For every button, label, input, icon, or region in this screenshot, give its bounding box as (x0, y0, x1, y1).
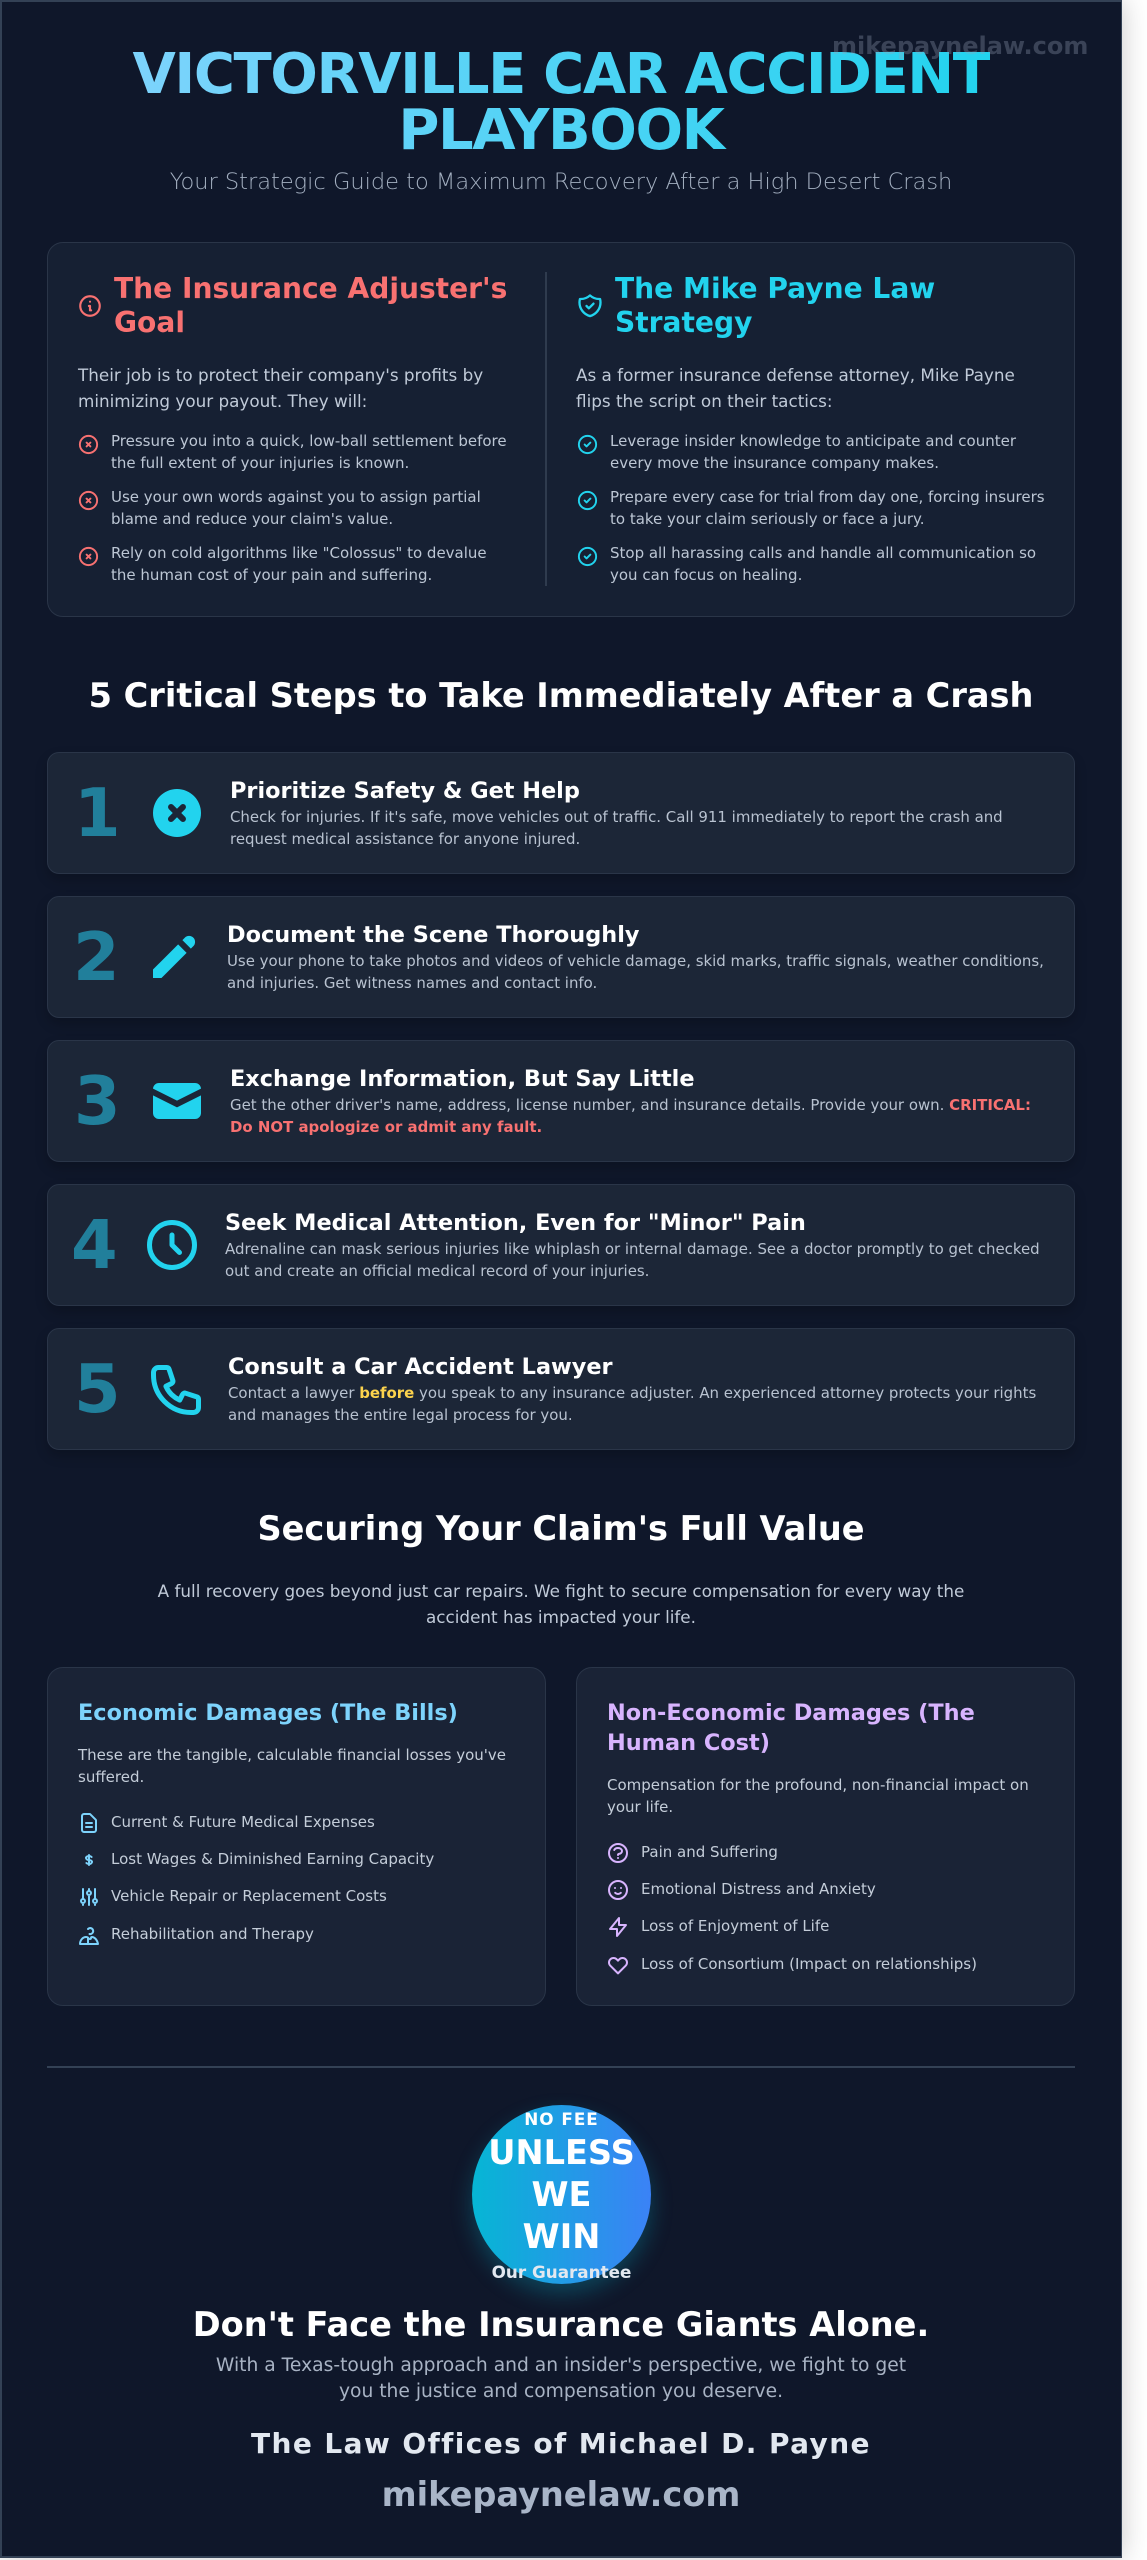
icon: x circle 1 (78, 434, 98, 454)
title (132, 42, 990, 163)
icon: x circle 2 (78, 490, 98, 510)
heading: insurance adjuster's goal (114, 272, 507, 339)
step 4 title: Seek Medical Attention, Even for "Minor" Pain (225, 1210, 806, 1236)
list item: vehicle repair: Vehicle Repair or Replacement Costs (111, 1887, 387, 1905)
step 4 description: Adrenaline can mask serious injuries like whiplash or internal damage. See a doctor promptly to get checked (225, 1240, 1040, 1258)
list item: own words: Use your own words against you to assign partial (111, 488, 481, 506)
badge: unless we win: WE (532, 2175, 591, 2214)
text: non-economic intro: Compensation for the profound, non-financial impact on (607, 1776, 1029, 1794)
list item: algorithms (111, 544, 487, 584)
list item: insider knowledge: Leverage insider knowledge to anticipate and counter (610, 432, 1016, 450)
badge: our guarantee: Our Guarantee (492, 2262, 631, 2282)
list item: insider knowledge: every move the insurance company makes. (610, 454, 939, 472)
text: strategy intro: As a former insurance defense attorney, Mike Payne (576, 365, 1015, 385)
badge: unless we win: WIN (523, 2217, 600, 2256)
list item: stop calls: you can focus on healing. (610, 566, 802, 584)
text: call to action: With a Texas-tough approach and an insider's perspective, we fight to get (216, 2354, 906, 2376)
title: VICTORVILLE CAR ACCIDENT (132, 42, 990, 107)
text: non-economic intro (607, 1776, 1029, 1816)
watermark: mikepaynelaw.com (832, 32, 1088, 60)
step 1 description: request medical assistance for anyone injured. (230, 830, 580, 848)
list item: prepare for trial: Prepare every case for trial from day one, forcing insurers (610, 488, 1045, 506)
step 4 description: out and create an official medical record of your injuries. (225, 1262, 649, 1280)
heading: securing your claim's full value: Securing Your Claim's Full Value (257, 1509, 865, 1548)
heading: non-economic damages: Non-Economic Damages (The (607, 1700, 975, 1726)
text: section intro: accident has impacted your life. (426, 1607, 696, 1627)
step card 3 (47, 1040, 1075, 1162)
list item: algorithms: Rely on cold algorithms like "Colossus" to devalue (111, 544, 487, 562)
badge: unless we win: UNLESS (488, 2133, 635, 2172)
list item: pain and suffering: Pain and Suffering (641, 1843, 778, 1861)
panel: economic damages (47, 1667, 546, 2006)
heading: insurance adjuster's goal: The Insurance Adjuster's (114, 272, 507, 305)
text: strategy intro (576, 365, 1015, 411)
list item: pressure: the full extent of your injuries is known. (111, 454, 409, 472)
step number 4: 4 (71, 1206, 118, 1284)
step number 2: 2 (73, 918, 120, 996)
icon: rehabilitation person (79, 1927, 99, 1945)
icon: adjustments (80, 1888, 98, 1906)
heading: non-economic damages (607, 1700, 975, 1756)
list item: enjoyment of life: Loss of Enjoyment of Life (641, 1917, 829, 1935)
step 3 description: Get the other driver's name, address, license number, and insurance details. Provide your own. CRITICAL: (230, 1096, 1031, 1114)
text: section intro: A full recovery goes beyond just car repairs. We fight to secure compensation for every way the (158, 1581, 964, 1601)
heading: non-economic damages: Human Cost) (607, 1730, 770, 1756)
firm name: The Law Offices of Michael D. Payne (251, 2427, 871, 2460)
text: economic intro: These are the tangible, calculable financial losses you've (78, 1746, 506, 1764)
icon: dollar (85, 1854, 93, 1866)
list item: prepare for trial: to take your claim seriously or face a jury. (610, 510, 925, 528)
icon: clock (147, 1220, 197, 1270)
list item: algorithms: the human cost of your pain and suffering. (111, 566, 432, 584)
list item: medical expenses: Current & Future Medical Expenses (111, 1813, 375, 1831)
section divider (47, 2066, 1075, 2068)
step number 3: 3 (74, 1062, 121, 1140)
list item: prepare for trial (610, 488, 1045, 528)
step 2 description (227, 952, 1044, 992)
step 1 description (230, 808, 1003, 848)
step 2 description: Use your phone to take photos and videos of vehicle damage, skid marks, traffic signals, weather conditions, (227, 952, 1044, 970)
text: adjuster intro: Their job is to protect their company's profits by (78, 365, 483, 385)
list item: stop calls: Stop all harassing calls and handle all communication so (610, 544, 1036, 562)
panel: adjuster vs strategy (47, 242, 1075, 617)
icon: shield check (578, 294, 602, 318)
text: adjuster intro (78, 365, 483, 411)
step card 1 (47, 752, 1075, 874)
icon: document (81, 1813, 97, 1833)
badge: unless we win (472, 2132, 651, 2258)
panel: non-economic damages (576, 1667, 1075, 2006)
list item: rehabilitation: Rehabilitation and Therapy (111, 1925, 314, 1943)
step 5 description (228, 1384, 1036, 1424)
heading: mike payne law strategy: Strategy (615, 306, 752, 339)
heading: 5 critical steps: 5 Critical Steps to Take Immediately After a Crash (89, 676, 1033, 715)
heading: economic damages: Economic Damages (The Bills) (78, 1700, 458, 1726)
text: call to action: you the justice and compensation you deserve. (339, 2381, 783, 2402)
step 5 title: Consult a Car Accident Lawyer (228, 1354, 613, 1380)
icon: pencil (153, 936, 196, 978)
badge: no fee: NO FEE (524, 2109, 599, 2129)
step 2 description: and injuries. Get witness names and contact info. (227, 974, 597, 992)
text: economic intro: suffered. (78, 1768, 144, 1786)
step 3 description: Do NOT apologize or admit any fault. (230, 1118, 542, 1136)
icon: check circle 1 (578, 434, 598, 454)
step 3 description (230, 1096, 1031, 1136)
step card 2 (47, 896, 1075, 1018)
list item: loss of consortium: Loss of Consortium (Impact on relationships) (641, 1955, 977, 1973)
list item: emotional distress: Emotional Distress and Anxiety (641, 1880, 876, 1898)
step 4 description (225, 1240, 1040, 1280)
icon: x circle 3 (78, 546, 98, 566)
icon: information circle (79, 295, 101, 317)
list item: pressure (111, 432, 507, 472)
step number 1: 1 (74, 774, 121, 852)
icon: check circle 3 (578, 546, 598, 566)
subtitle: Your Strategic Guide to Maximum Recovery After a High Desert Crash (170, 169, 952, 195)
divider between columns (545, 272, 546, 586)
heading: mike payne law strategy (615, 272, 935, 339)
heading: insurance adjuster's goal: Goal (114, 306, 185, 339)
icon: check circle 2 (578, 490, 598, 510)
title: PLAYBOOK (398, 98, 724, 163)
list item: own words (111, 488, 481, 528)
step 2 title: Document the Scene Thoroughly (227, 922, 639, 948)
text: call to action (0, 2352, 1122, 2405)
list item: insider knowledge (610, 432, 1016, 472)
list item: stop calls (610, 544, 1036, 584)
icon: x circle solid (153, 789, 201, 837)
icon: smiley (608, 1880, 628, 1900)
step 3 title: Exchange Information, But Say Little (230, 1066, 695, 1092)
step number 5: 5 (74, 1350, 121, 1428)
heading: don't face the insurance giants alone: Don't Face the Insurance Giants Alone. (193, 2305, 929, 2344)
step 5 description: and manages the entire legal process for you. (228, 1406, 573, 1424)
icon: phone (151, 1365, 201, 1415)
badge: no fee unless we win (472, 2105, 651, 2284)
step 1 description: Check for injuries. If it's safe, move vehicles out of traffic. Call 911 immediately to report the crash and (230, 808, 1003, 826)
text: non-economic intro: your life. (607, 1798, 673, 1816)
step card 5 (47, 1328, 1075, 1450)
icon: question circle (608, 1843, 628, 1863)
list item: own words: blame and reduce your claim's value. (111, 510, 393, 528)
website: mikepaynelaw.com (382, 2475, 740, 2514)
icon: heart (606, 1953, 630, 1977)
icon: mail (153, 1083, 201, 1119)
text: strategy intro: flips the script on their tactics: (576, 391, 833, 411)
list item: lost wages: Lost Wages & Diminished Earning Capacity (111, 1850, 434, 1868)
text: adjuster intro: minimizing your payout. They will: (78, 391, 367, 411)
text: section intro (158, 1581, 964, 1627)
list item: pressure: Pressure you into a quick, low-ball settlement before (111, 432, 507, 450)
heading: mike payne law strategy: The Mike Payne Law (615, 272, 935, 305)
icon: lightning bolt (609, 1917, 627, 1937)
step card 4 (47, 1184, 1075, 1306)
text: economic intro (78, 1746, 506, 1786)
step 5 description: Contact a lawyer before you speak to any insurance adjuster. An experienced attorney protects your rights (228, 1384, 1036, 1402)
step 1 title: Prioritize Safety & Get Help (230, 778, 580, 804)
